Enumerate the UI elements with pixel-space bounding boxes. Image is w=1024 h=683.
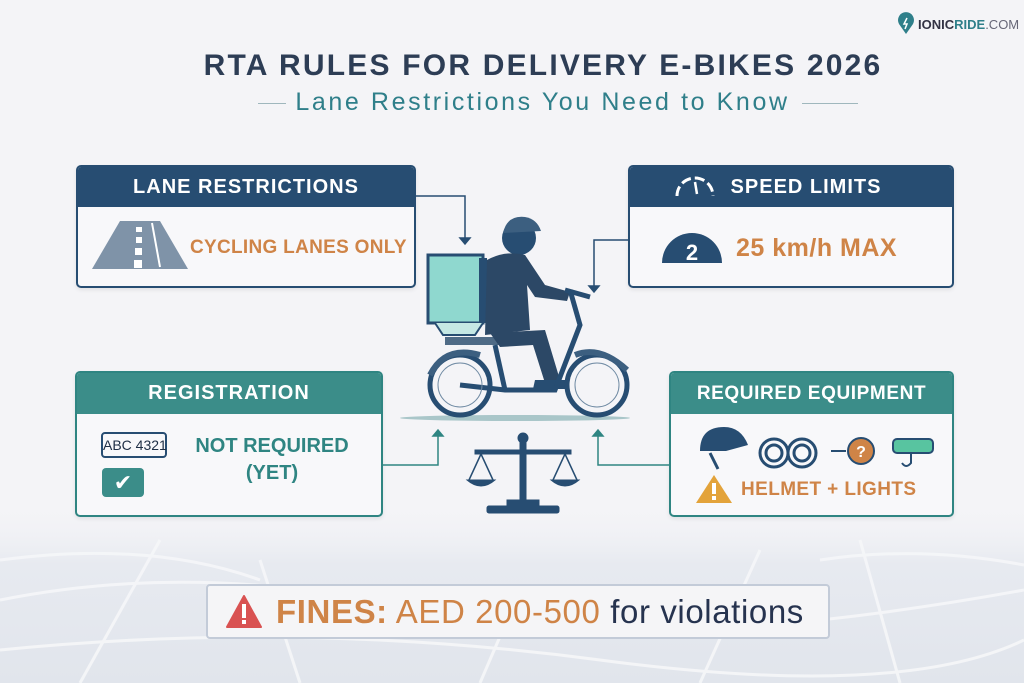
fines banner bbox=[206, 584, 830, 639]
icon: speedometer: 2 bbox=[686, 240, 698, 265]
text bbox=[195, 435, 349, 484]
heading: LANE RESTRICTIONS bbox=[133, 176, 359, 198]
panel: required equipment bbox=[669, 371, 954, 517]
panel: speed limits bbox=[628, 165, 954, 288]
text: NOT REQUIRED bbox=[195, 435, 349, 457]
text: CYCLING LANES ONLY bbox=[190, 237, 407, 258]
text: FINES: AED 200-500 for violations bbox=[276, 593, 804, 630]
text: (YET) bbox=[246, 462, 298, 484]
heading bbox=[630, 167, 952, 207]
icon: scales of justice bbox=[466, 432, 580, 514]
arrow: registration to rider bbox=[383, 430, 443, 465]
heading: REGISTRATION bbox=[148, 382, 310, 404]
heading bbox=[77, 373, 381, 414]
arrow: lane to rider bbox=[416, 196, 470, 244]
illustration: delivery rider bbox=[400, 216, 630, 421]
heading: SPEED LIMITS bbox=[731, 176, 881, 198]
icon: warning bbox=[696, 475, 732, 503]
text: HELMET + LIGHTS bbox=[741, 479, 916, 500]
panel: registration bbox=[75, 371, 383, 517]
icon: warning red bbox=[226, 595, 262, 628]
panel: lane restrictions bbox=[76, 165, 416, 288]
text: 25 km/h MAX bbox=[736, 234, 897, 262]
icon: road bbox=[92, 221, 188, 269]
heading: REQUIRED EQUIPMENT bbox=[697, 383, 926, 404]
arrow: equipment to rider bbox=[593, 430, 669, 465]
icon: check bbox=[102, 468, 144, 497]
icon: speedometer bbox=[662, 233, 722, 265]
icons: equipment bbox=[700, 427, 934, 470]
icon: small gauge bbox=[676, 176, 714, 196]
icon: plate bbox=[101, 432, 167, 458]
logo bbox=[898, 12, 1019, 34]
logo: IONICRIDE.COM bbox=[918, 17, 1019, 32]
subtitle: Lane Restrictions You Need to Know bbox=[295, 88, 790, 116]
heading bbox=[78, 167, 414, 207]
icon: check: ✔ bbox=[114, 470, 132, 495]
heading bbox=[671, 373, 952, 414]
icons: equipment: ? bbox=[856, 444, 866, 461]
title: RTA RULES FOR DELIVERY E-BIKES 2026 bbox=[204, 49, 882, 82]
icon: plate: ABC 4321 bbox=[103, 437, 167, 453]
arrow: speed to rider bbox=[589, 240, 628, 292]
